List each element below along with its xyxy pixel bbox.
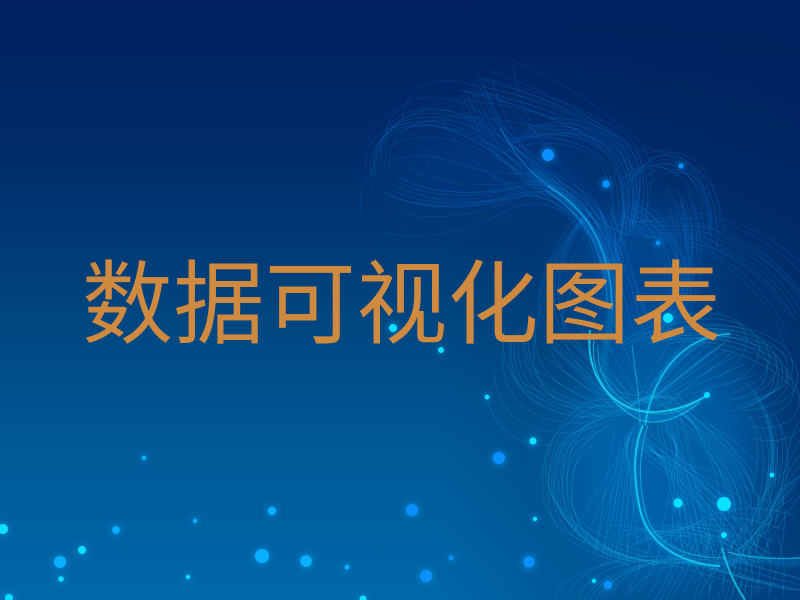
glowing dots (0, 147, 776, 600)
cyan dots (0, 313, 774, 600)
bright main strands (500, 128, 800, 600)
blue haze behind strands (390, 115, 760, 580)
title: 数据可视化图表 (82, 255, 722, 356)
fine strands: upper swirl (346, 39, 800, 387)
fine strands: bottom edge (554, 492, 800, 600)
dot halos (0, 147, 776, 600)
blue dots (406, 149, 684, 589)
strand glow band (530, 170, 800, 564)
sky-blue dots (54, 456, 349, 569)
fine strands: lower swirl (484, 286, 800, 600)
